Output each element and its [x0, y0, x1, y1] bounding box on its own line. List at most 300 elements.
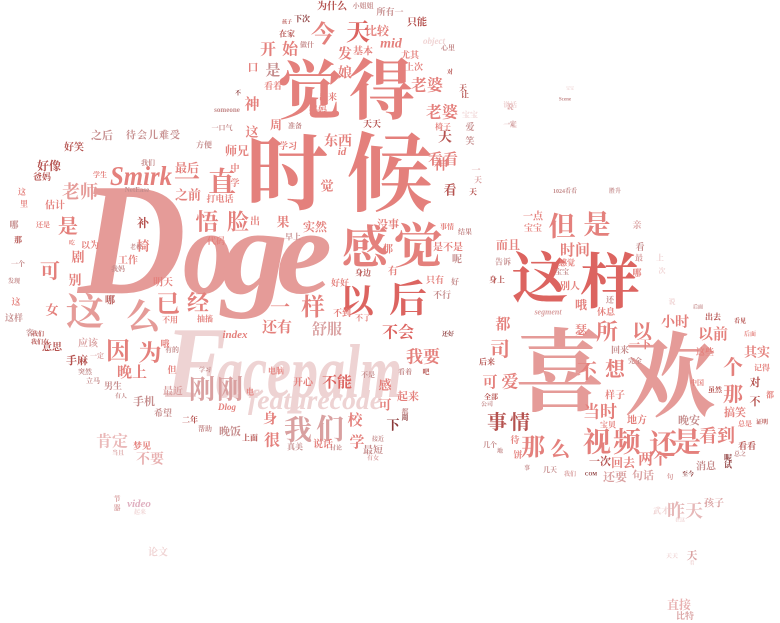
word: Smirk: Smirk [110, 161, 172, 191]
small words, right heart: 说 [668, 297, 676, 306]
large words in the left heart: 晚上 [117, 363, 147, 381]
small words, lower left heart: 女 [45, 302, 59, 318]
small words, top of left heart: 让 [461, 90, 469, 100]
small words, right heart: 虽然 [708, 385, 723, 394]
separate small clusters below the hearts: 起来 [134, 508, 146, 516]
small words, top of left heart: 尤其 [401, 49, 421, 60]
large words in the left heart: 舒服 [312, 320, 342, 338]
small words, upper left heart [18, 61, 260, 228]
separate small clusters below the hearts: 天天 [666, 553, 678, 560]
small words, right heart: 至今 [682, 470, 694, 478]
small words, upper left heart: 这 [245, 124, 259, 140]
small words, lower left heart: 实然 [303, 220, 328, 234]
small words, right heart: 一点 [523, 210, 544, 222]
small words, top of left heart: 孩子 [282, 18, 292, 26]
small words, lower left heart: 学习 [199, 366, 211, 374]
word: featurecode: featurecode [248, 385, 382, 415]
large words in the left heart: 始 [282, 40, 300, 58]
small words, right heart: 1024看看 [553, 187, 577, 195]
large words in the right heart: 回去 [611, 455, 636, 470]
small words, lower left heart: 电脑 [268, 366, 284, 376]
large words in the left heart: 悟 [196, 210, 218, 234]
small words, upper left heart: 中 [230, 162, 240, 173]
small words, lower left heart: 我们有 [31, 338, 49, 346]
large words in the left heart: 是 [58, 215, 78, 238]
small floating cluster between the hearts: 说话 [503, 100, 517, 109]
small words, lower left heart: 以为 [81, 239, 99, 250]
large words in the right heart: 可 [482, 374, 498, 391]
small words, lower left heart: 说话 [313, 438, 333, 450]
small words, right heart: 一下 [629, 337, 652, 351]
small words, right heart: 后面 [693, 304, 703, 310]
small words, right heart: 地方 [627, 414, 647, 426]
small words, lower left heart: 结果 [458, 227, 472, 236]
separate small clusters below the hearts: 器 [114, 503, 120, 512]
large words in the left heart: 后 [389, 279, 427, 321]
large words in the left heart: 不能 [322, 373, 352, 391]
large words in the right heart: 么 [550, 438, 571, 461]
large words in the left heart: 刚 [217, 374, 243, 404]
large words in the left heart: 们 [316, 414, 344, 446]
small words, lower left heart: 身边 [355, 268, 371, 278]
small words, top of left heart: mid [380, 36, 403, 52]
large words in the right heart: 但 [548, 212, 576, 242]
small words, top of left heart: 天 [474, 176, 482, 184]
small words, upper left heart: NetEase [125, 186, 149, 194]
large words in the right heart: 还 [649, 428, 679, 460]
large words in the right heart: 频 [613, 426, 643, 458]
large words in the left heart [40, 19, 459, 451]
small words, lower left heart: 下 [386, 418, 400, 432]
small words, right heart: segment [533, 308, 562, 316]
small words, top of left heart: 在家 [279, 28, 295, 38]
small words, lower left heart: 椅 [136, 238, 150, 254]
small words, lower left heart: 一定 [90, 352, 104, 360]
small words, right heart: 后来 [479, 356, 495, 366]
large words in the right heart: 还要 [603, 469, 628, 484]
small words, lower left heart: 周 [402, 414, 408, 422]
small floating cluster between the hearts: 一定 [504, 120, 516, 128]
small words, right heart: 对 [750, 375, 760, 389]
large words in the left heart: 以 [340, 284, 377, 320]
large words in the right heart: 想 [605, 358, 627, 381]
large words in the right heart: 司 [490, 338, 510, 361]
small words, lower left heart: 那 [14, 236, 22, 244]
small floating cluster between the hearts: Scene [559, 98, 572, 102]
small words, lower left heart: 我们 [32, 330, 44, 338]
small words, lower left heart: 突然 [78, 367, 93, 376]
small words, lower left heart: 立马 [86, 376, 100, 385]
small words, right heart: 试 [724, 460, 732, 470]
large words in the left heart: 得 [349, 56, 415, 128]
small words, upper left heart: 学生 [93, 170, 107, 179]
small words, lower left heart [5, 214, 472, 462]
small words, upper left heart: 估计 [45, 198, 65, 212]
small words, lower left heart: 二年 [182, 414, 198, 424]
small words, lower left heart: 手麻 [66, 353, 88, 367]
small words, top of left heart: 看 [443, 182, 457, 198]
small words, lower left heart: 吧 [422, 368, 430, 376]
small words, lower left heart: 这样 [5, 312, 23, 323]
small words, right heart: 上 [656, 252, 664, 262]
large words in the left heart: 脸 [227, 210, 249, 234]
separate small clusters below the hearts: 梦见 [133, 440, 151, 451]
large words in the right heart: 样 [580, 250, 640, 316]
small words, lower left heart: 发现 [8, 277, 20, 285]
large words in the left heart: 这 [66, 292, 104, 334]
small words, lower left heart: 我妈 [111, 264, 125, 273]
large words in the right heart: 是 [584, 210, 610, 240]
large words in the left heart: 老婆 [411, 76, 444, 94]
small words, upper left heart: 方便 [196, 140, 212, 150]
small words, upper left heart: 之前 [175, 188, 201, 202]
small words, lower left heart: 应该 [78, 336, 99, 350]
large words in the left heart: 可 [40, 260, 60, 283]
small words, lower left heart: 看着 [398, 367, 412, 376]
small words, top of left heart: 对 [447, 68, 453, 76]
small words, right heart: 宝宝 [555, 268, 569, 276]
large words in the right heart: 当时 [583, 402, 617, 422]
small words, right heart: 别人 [560, 280, 580, 292]
word: Doge: g [219, 185, 288, 320]
separate small clusters below the hearts: video [127, 498, 151, 510]
small words, lower left heart: 是不是 [433, 240, 463, 254]
small words, top of left heart: 看着 [264, 80, 282, 91]
small words, lower left heart: 剧 [71, 250, 85, 264]
small words, right heart: 次 [658, 266, 666, 275]
large words in the left heart: 因 [106, 338, 130, 365]
small words, lower left heart: 有人 [115, 392, 127, 400]
large words in the right heart: 搞笑 [724, 405, 746, 419]
small words, right heart: 句 [666, 472, 674, 481]
small words, right heart: 告诉 [495, 256, 512, 266]
small words, right heart: 几个 [483, 440, 497, 449]
small words, lower left heart: 身 [263, 410, 277, 428]
large words in the left heart: 直 [208, 166, 236, 198]
small words, lower left heart: 有女 [367, 454, 380, 462]
small words, lower left heart: 有的 [165, 345, 179, 354]
separate small clusters below the hearts: 肯定 [96, 432, 128, 450]
large words in the left heart: 老师 [62, 182, 98, 202]
large words in the right heart: 那 [723, 383, 743, 406]
large words in the left heart: 校 [347, 411, 363, 429]
large words in the left heart: 东西 [324, 132, 352, 150]
small words, lower left heart: 客 [26, 328, 34, 338]
small words, lower left heart: 一个 [11, 259, 25, 268]
large words in the left heart: 我要 [406, 348, 441, 366]
separate small clusters below the hearts: 天 [686, 549, 698, 562]
small words, top of left heart: 周 [270, 118, 282, 132]
small words, top of left heart: 做什 [300, 40, 314, 49]
small words, top of left heart: 小姐姐 [352, 1, 374, 10]
small words, right heart: COM [585, 472, 597, 478]
small words, right heart: 后面 [744, 330, 756, 338]
small words, right heart: 记得 [754, 362, 770, 372]
small words, lower left heart: 意思 [42, 340, 63, 354]
separate small clusters below the hearts: 孩子 [704, 496, 724, 510]
small words, lower left heart: 都 [402, 407, 408, 416]
small words, upper left heart: 里 [20, 200, 28, 208]
small words, top of left heart: 妈妈 [309, 104, 327, 115]
word: Facepalm: F [164, 307, 227, 420]
small words, top of left heart: 天 [459, 84, 467, 92]
large words in the right heart: 个 [723, 356, 743, 379]
small words, right heart [479, 187, 774, 481]
separate small clusters below the hearts: 直接 [667, 597, 692, 612]
small words, lower left heart: 抽搐 [197, 314, 214, 324]
small words, right heart: 胜升 [609, 187, 621, 195]
small words, right heart: 证明 [756, 418, 768, 426]
small words, right heart: 几天 [543, 465, 557, 474]
small words, upper left heart: 不 [235, 89, 242, 97]
small words, lower left heart: 早上 [285, 232, 301, 242]
large words in the left heart: 学 [349, 434, 365, 451]
small words, right heart: 哦 [575, 298, 588, 312]
large words in the left heart: 样 [301, 294, 325, 321]
small words, lower left heart: 可 [378, 398, 392, 412]
separate small clusters below the hearts: 看 [689, 560, 695, 566]
small words, lower left heart: 感 [378, 378, 392, 392]
small words, lower left heart: 事情 [440, 222, 454, 231]
large words in the right heart: 视 [583, 426, 611, 458]
small words, top of left heart: 说 [506, 102, 514, 111]
small words, top of left heart: 只能 [407, 16, 427, 28]
large words in the right heart: 两个 [638, 450, 668, 468]
separate small clusters below the hearts: 节 [114, 494, 120, 503]
small words, right heart: 而且 [496, 238, 520, 252]
small words, right heart: 还 [606, 294, 615, 304]
large words in the left heart: 开 [260, 40, 276, 58]
small words, top of left heart: 是 [265, 62, 281, 79]
small words, upper left heart: 好像 [37, 158, 61, 173]
small words, top of left heart: 笑 [465, 135, 475, 146]
small words, top of left heart: 基本 [353, 44, 373, 58]
small words, lower left heart: 哪 [105, 294, 115, 306]
large words in the right heart: 一次 [589, 454, 611, 468]
small words, right heart: 宝贝 [600, 420, 617, 430]
small words, lower left heart: 吃 [69, 239, 75, 247]
small words, top of left heart: 准备 [288, 121, 302, 130]
large words in the left heart: 一 [270, 297, 290, 319]
small words, upper left heart: 待会儿难受 [126, 128, 180, 142]
separate small clusters below the hearts: 帮助 [198, 424, 212, 433]
large words in the left heart: 觉 [278, 56, 342, 128]
small words, right heart: 休息 [597, 306, 616, 317]
large words in the right heart [482, 210, 771, 484]
small words, lower left heart: 最近 [163, 384, 183, 398]
small words, top of left heart: 上次 [405, 61, 423, 72]
small words, upper left heart: 好笑 [64, 140, 84, 154]
large words in the right heart: 事 [487, 411, 507, 434]
small words, lower left heart: index [222, 329, 248, 341]
small words, right heart: 中国 [690, 378, 704, 387]
word: Doge: o [183, 185, 233, 320]
word: Doge: D [76, 150, 186, 328]
small words, right heart: 事 [524, 464, 530, 472]
separate small clusters below the hearts: 武才 [653, 506, 669, 516]
large words in the left heart: 天 [346, 19, 370, 46]
separate small clusters below the hearts: 在这 [675, 516, 685, 524]
small words, top of left heart: 娘 [338, 64, 352, 82]
small words, top of left heart: 一 [471, 165, 481, 175]
small words, right heart: 晚安 [678, 413, 701, 427]
small words, right heart: 我们 [564, 470, 576, 478]
separate small clusters below the hearts: 晚饭 [219, 424, 241, 438]
small words, top of left heart [264, 0, 517, 198]
word: Doge [76, 150, 332, 328]
large words in the left heart: 经 [187, 290, 210, 316]
small words, lower left heart: 那 [383, 244, 393, 256]
large words in the right heart: 小时 [661, 314, 689, 330]
small words, right heart: 身上 [489, 274, 505, 284]
small words, lower left heart: 只有 [426, 274, 444, 285]
small floating cluster between the hearts: 宝宝 [566, 86, 574, 90]
separate small clusters below the hearts: 上面 [242, 432, 258, 442]
large words in the left heart: 老婆 [426, 102, 459, 122]
large words in the left heart: 觉 [394, 220, 442, 274]
small words, lower left heart: 男生 [104, 380, 122, 391]
small words, lower left heart: 有 [388, 264, 398, 278]
small words, upper left heart: someone [214, 106, 240, 114]
small words, right heart: 宝宝 [524, 223, 542, 233]
large words in the right heart: 那 [521, 434, 545, 461]
small words, top of left heart: 下次 [294, 14, 310, 24]
word: Doge: e [276, 185, 332, 320]
separate small clusters below the hearts: 当且 [112, 449, 124, 457]
large words in the right heart: 这 [512, 249, 568, 311]
small words, lower left heart: 还是 [36, 220, 50, 229]
small words, top of left heart: 一起 [503, 120, 517, 129]
small words, top of left heart: 觉 [320, 178, 334, 194]
large words in the left heart: 还有 [262, 318, 292, 336]
large words in the right heart: 看到 [699, 426, 735, 446]
small words, right heart: 呢 [724, 454, 732, 462]
small words, lower left heart: 电 [246, 386, 254, 396]
separate small clusters below the hearts: 比特 [676, 610, 694, 621]
word: Facepalm: acepalm [216, 330, 402, 414]
large words in the left heart: 为 [138, 340, 162, 366]
small words, top of left heart: 为什么 [317, 0, 348, 12]
large words in the right heart: 情 [510, 411, 530, 434]
large words in the right heart: 不 [577, 360, 598, 383]
small words, upper left heart: 打电话 [206, 193, 234, 204]
small words, lower left heart: 还好 [442, 330, 454, 338]
separate small clusters below the hearts: 论文 [148, 546, 168, 558]
small words, upper left heart: 神 [244, 96, 260, 113]
large words in the left heart: 感 [342, 222, 391, 274]
small words, lower left heart: 但 [167, 364, 177, 375]
small words, top of left heart: 天 [469, 188, 477, 196]
large words in the right heart: 欢 [624, 327, 716, 429]
small words, upper left heart: 爸妈 [33, 171, 51, 182]
small words, lower left heart: 不是 [361, 370, 375, 379]
small words, right heart: 地 [497, 447, 503, 455]
small words, upper left heart: 一口气 [212, 123, 232, 132]
small words, lower left heart: 代码 [207, 235, 225, 246]
small words, right heart: 出去 [705, 312, 722, 322]
small words, upper left heart: 学 [230, 177, 240, 188]
small words, top of left heart: 心里 [441, 43, 455, 52]
small words, right heart: 这些 [696, 346, 714, 357]
large words in the right heart: 句话 [632, 468, 654, 482]
small words, lower left heart: 起来 [397, 389, 419, 403]
small words, lower left heart: 不到 [333, 307, 351, 318]
small words, upper left heart: 口 [248, 61, 258, 74]
large words in the right heart: 喜 [515, 324, 605, 424]
large words in the left heart: 候 [347, 127, 433, 223]
small words, top of left heart: 所有一 [376, 6, 404, 17]
large words in the right heart: 时间 [560, 241, 590, 259]
small words, lower left heart: 哦 [160, 338, 170, 349]
small words, upper left heart: 出 [250, 214, 260, 228]
small words, top of left heart: 爱 [464, 121, 475, 132]
small words, right heart: 看看 [738, 440, 756, 451]
small words, lower left heart: 老板 [130, 243, 142, 251]
large words in the right heart: 消息 [696, 460, 717, 472]
large words in the left heart: 刚 [189, 374, 215, 404]
small words, right heart: 饼 [513, 449, 523, 460]
small words, top of left heart: 学习 [279, 140, 297, 151]
small words, right heart: 都 [766, 390, 774, 400]
large words in the left heart: 么 [126, 298, 162, 336]
large words in the left heart: 今 [311, 21, 335, 48]
small words, lower left heart: 手机 [133, 394, 155, 408]
small words, lower left heart: 工作 [118, 254, 138, 266]
small words, lower left heart: 接近 [372, 435, 384, 443]
small words, top of left heart: 宝宝 [462, 110, 478, 120]
large words in the left heart: 不会 [382, 322, 414, 342]
small words, upper left heart: 师兄 [225, 143, 249, 158]
small floating cluster between the hearts [503, 86, 574, 128]
small words, top of left heart: 椅子 [435, 122, 451, 132]
small words, right heart: 瑟 [575, 323, 588, 337]
separate small clusters below the hearts [96, 424, 724, 621]
large words in the left heart: 已 [156, 291, 180, 318]
small words, lower left heart: 开心 [293, 376, 315, 388]
small words, top of left heart: 天天 [363, 119, 381, 129]
large words in the left heart: 我 [284, 414, 312, 446]
small words, right heart: 全部 [484, 392, 498, 401]
large words in the right heart: 是 [673, 426, 701, 458]
small words, lower left heart: 没事 [377, 217, 399, 231]
small words, right heart: 总是 [738, 419, 752, 428]
small words, upper left heart: 我们 [141, 158, 155, 167]
small words, top of left heart: 天 [438, 130, 452, 146]
small words, right heart: 公司 [481, 400, 493, 408]
large words in the left heart: 比较 [365, 23, 390, 38]
small words, lower left heart: 希望 [154, 407, 172, 418]
small words, right heart: 待 [510, 434, 520, 445]
small words, lower left heart: 果 [276, 214, 290, 230]
separate small clusters below the hearts: 不要 [136, 450, 165, 468]
small words, right heart: 哪 [632, 268, 642, 278]
small words, right heart: 样子 [605, 388, 625, 402]
large words in the right heart: 都 [495, 315, 511, 333]
small words, lower left heart: 真美 [287, 442, 303, 452]
large words in the left heart: 时 [246, 130, 328, 220]
large words in the left heart: 看看 [428, 151, 458, 168]
large words in the right heart: 以前 [698, 325, 728, 343]
small words, lower left heart: 呢 [452, 254, 462, 266]
large words in the right heart: 以 [632, 321, 654, 343]
small words, lower left heart: 补 [137, 215, 150, 230]
small words, lower left heart: 别 [68, 272, 82, 288]
small words, lower left heart: 好好 [331, 277, 349, 288]
small words, right heart: 感觉 [559, 258, 575, 268]
small words, right heart: 看 [635, 241, 645, 252]
small words, top of left heart: 神 [434, 156, 448, 174]
small words, lower left heart: 好 [451, 276, 459, 286]
